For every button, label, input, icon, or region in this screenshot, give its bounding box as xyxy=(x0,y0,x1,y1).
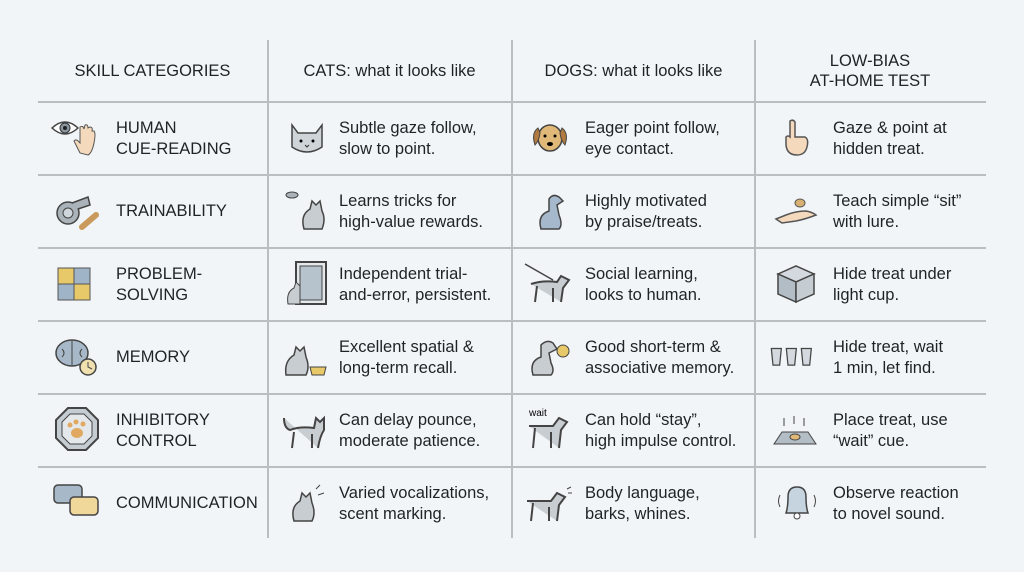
cats row5: Can delay pounce, xyxy=(339,410,477,428)
test row1: Gaze & point at xyxy=(833,118,947,136)
test row6: to novel sound. xyxy=(833,504,945,522)
cats row3 xyxy=(339,264,491,304)
cats row2: high-value rewards. xyxy=(339,212,483,230)
dogs row3: Social learning, xyxy=(585,264,698,282)
icon: puzzle xyxy=(58,268,90,300)
icon: treat on mat xyxy=(773,416,817,444)
cats row3: Independent trial- xyxy=(339,264,467,282)
icon: three cups xyxy=(770,348,812,366)
row 6 label: COMMUNICATION xyxy=(116,494,258,512)
test row4 xyxy=(833,338,943,376)
dogs row5: Can hold “stay”, xyxy=(585,410,701,428)
test row5: Place treat, use xyxy=(833,410,948,428)
icon: cat face xyxy=(291,122,323,153)
test row5: “wait” cue. xyxy=(833,432,909,450)
icon: barking dog xyxy=(523,477,573,527)
row 5 label: INHIBITORY xyxy=(116,410,210,428)
test row1: hidden treat. xyxy=(833,140,925,158)
row 3 label: SOLVING xyxy=(116,286,188,304)
dogs row4: associative memory. xyxy=(585,358,734,376)
icon: brain and clock xyxy=(55,339,97,376)
row 5 label: CONTROL xyxy=(116,432,197,450)
row 3 label: PROBLEM- xyxy=(116,264,202,282)
icon: cat with bowl xyxy=(284,346,327,376)
header: test xyxy=(810,52,930,90)
test row6 xyxy=(833,467,959,540)
cats row6: scent marking. xyxy=(339,504,446,522)
cats row5 xyxy=(339,410,480,450)
icon: octagon paw xyxy=(55,407,99,451)
test row2: with lure. xyxy=(833,212,899,230)
test row5 xyxy=(833,410,948,450)
header: test: LOW-BIAS xyxy=(830,52,910,70)
dogs row2 xyxy=(585,192,707,230)
cats row4: long-term recall. xyxy=(339,358,457,376)
row 1 label: CUE-READING xyxy=(116,140,232,158)
dogs row6: Body language, xyxy=(585,484,700,502)
icon: dog on leash xyxy=(524,263,570,302)
icon: whistle and bone xyxy=(56,196,99,230)
row 3 label xyxy=(116,264,202,304)
icon: dog face xyxy=(533,124,567,152)
icon: box xyxy=(776,265,816,304)
icon: hand with treat xyxy=(774,198,818,224)
header: dogs: DOGS: what it looks like xyxy=(545,62,722,80)
cats row4 xyxy=(339,338,474,376)
icon: meowing cat xyxy=(282,477,332,527)
icon: sitting cat with clicker xyxy=(286,192,325,230)
test row4: Hide treat, wait xyxy=(833,338,943,356)
row 5 label xyxy=(116,410,210,450)
icon: pointing hand xyxy=(785,119,808,156)
icon: bell xyxy=(772,477,822,527)
test row1 xyxy=(833,118,947,158)
row 2 label: TRAINABILITY xyxy=(116,202,227,220)
test row3 xyxy=(833,264,952,304)
icon: dog wait xyxy=(528,408,568,448)
row 1 label xyxy=(116,118,232,158)
cats row6: Varied vocalizations, xyxy=(339,484,489,502)
header: test: AT-HOME TEST xyxy=(810,72,930,90)
test row2 xyxy=(833,192,961,230)
test row3: light cup. xyxy=(833,286,899,304)
dogs row4 xyxy=(585,338,734,376)
cats row1: slow to point. xyxy=(339,140,435,158)
dogs row6: barks, whines. xyxy=(585,504,690,522)
row 4 label: MEMORY xyxy=(116,348,190,366)
dogs row5: high impulse control. xyxy=(585,432,736,450)
dogs row2: by praise/treats. xyxy=(585,212,702,230)
icon: crouching cat xyxy=(283,416,325,448)
dogs row1 xyxy=(585,118,720,158)
cats row5: moderate patience. xyxy=(339,432,480,450)
dogs row1: eye contact. xyxy=(585,140,674,158)
dogs row2: Highly motivated xyxy=(585,192,707,210)
dogs row1: Eager point follow, xyxy=(585,118,720,136)
dogs row3: looks to human. xyxy=(585,286,701,304)
row 1 label: HUMAN xyxy=(116,118,176,136)
header: skill categories: SKILL CATEGORIES xyxy=(75,62,230,80)
icon: dog with ball xyxy=(531,340,570,376)
dogs row5 xyxy=(585,410,736,450)
dogs row4: Good short-term & xyxy=(585,338,721,356)
cats row2: Learns tricks for xyxy=(339,192,456,210)
cats row4: Excellent spatial & xyxy=(339,338,474,356)
icon: cat at door xyxy=(287,261,327,305)
header: cats: CATS: what it looks like xyxy=(303,62,476,80)
test row4: 1 min, let find. xyxy=(833,358,936,376)
dogs row3 xyxy=(585,264,701,304)
cats row1: Subtle gaze follow, xyxy=(339,118,477,136)
icon: dog wait: wait xyxy=(528,408,547,419)
test row2: Teach simple “sit” xyxy=(833,192,961,210)
cats row3: and-error, persistent. xyxy=(339,286,491,304)
icon: eye and hand xyxy=(51,121,96,156)
cats row2 xyxy=(339,192,483,230)
test row6: Observe reaction xyxy=(833,484,959,502)
cats row1 xyxy=(339,118,477,158)
icon: sitting dog xyxy=(539,194,564,230)
dogs row6 xyxy=(585,467,700,540)
test row3: Hide treat under xyxy=(833,264,951,282)
cats row6 xyxy=(339,467,489,540)
icon: speech bubbles xyxy=(53,484,99,516)
